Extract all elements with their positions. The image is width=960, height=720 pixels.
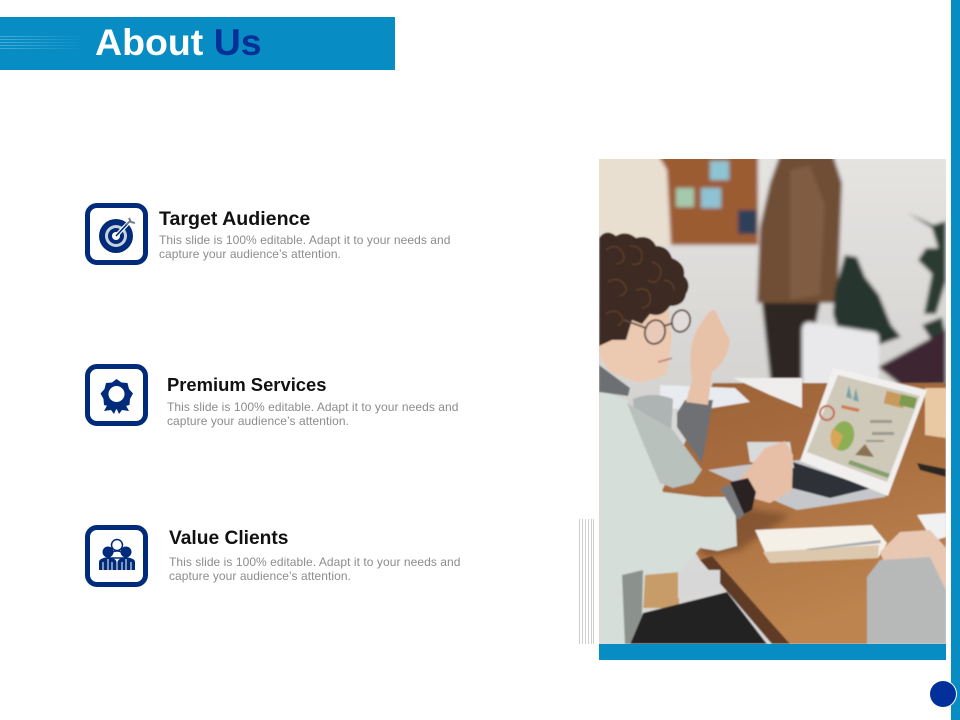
floor and chair	[642, 570, 720, 608]
description	[167, 400, 458, 428]
icon: group of clients	[85, 525, 148, 587]
description	[159, 233, 450, 261]
item: target audience	[85, 203, 450, 265]
mug and hand	[741, 441, 794, 503]
item: premium services	[85, 364, 458, 428]
trousers	[630, 592, 767, 644]
left cup	[633, 395, 673, 433]
wood shadow	[698, 506, 788, 558]
table	[660, 383, 946, 644]
laptop	[708, 368, 927, 510]
papers on table	[733, 378, 802, 408]
table side edge	[700, 556, 790, 644]
photo: office meeting illustration	[599, 159, 946, 660]
description	[169, 555, 460, 583]
right person	[867, 513, 946, 644]
title banner	[0, 17, 395, 70]
description: This slide is 100% editable. Adapt it to your needs and	[167, 400, 458, 414]
seated person shirt	[599, 390, 756, 644]
description: This slide is 100% editable. Adapt it to your needs and	[169, 555, 460, 569]
title text: About Us	[95, 21, 262, 63]
heading: Value Clients	[169, 528, 288, 549]
icon: target with arrows	[85, 203, 148, 265]
description: capture your audience’s attention.	[159, 247, 341, 261]
banner stripes	[0, 36, 77, 49]
notebook	[755, 525, 887, 563]
item: value clients	[85, 525, 460, 587]
office background	[599, 159, 946, 401]
description: capture your audience’s attention.	[167, 414, 349, 428]
heading: Premium Services	[167, 374, 326, 395]
description: This slide is 100% editable. Adapt it to your needs and	[159, 233, 450, 247]
description: capture your audience’s attention.	[169, 569, 351, 583]
right edge bar	[951, 0, 960, 720]
dark phone	[917, 463, 946, 477]
lower background	[599, 409, 946, 644]
vertical line pattern	[579, 519, 594, 644]
heading: Target Audience	[159, 208, 310, 230]
right cup	[925, 388, 946, 438]
photo bottom bar	[599, 644, 946, 660]
page number circle	[930, 681, 956, 707]
icon: award rosette	[85, 364, 148, 426]
seated person head and hand	[599, 232, 730, 405]
